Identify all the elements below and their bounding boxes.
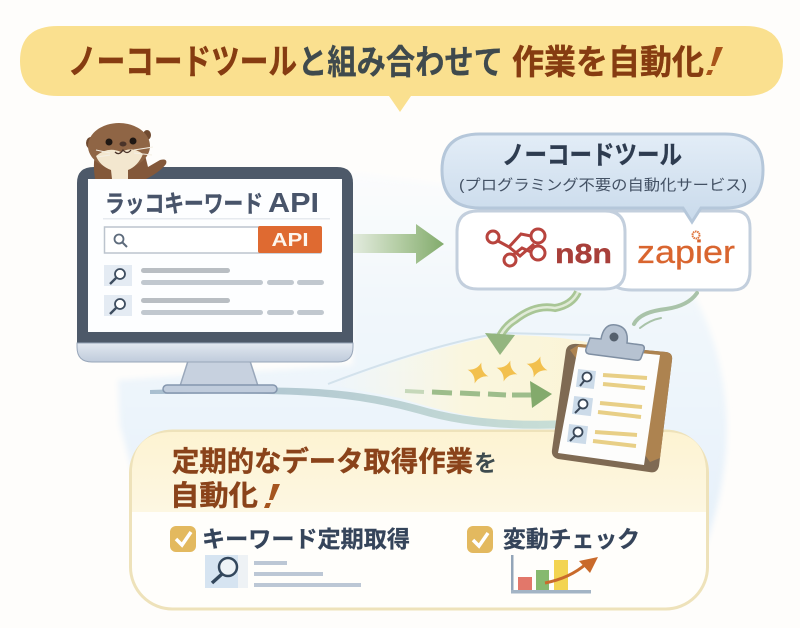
clipboard row 2	[572, 396, 642, 417]
title banner	[20, 26, 783, 112]
clipboard	[552, 325, 672, 472]
screen heading: ラッコキーワード	[105, 191, 263, 218]
result row 1	[104, 265, 324, 286]
bubble subheading: (プログラミング不要の自動化サービス)	[459, 177, 747, 194]
bubble heading: ノーコードツール	[502, 140, 682, 170]
screen heading: API	[268, 187, 319, 218]
n8n card: n8n	[555, 238, 612, 269]
monitor screen	[88, 179, 342, 332]
background glow	[118, 172, 727, 560]
no-code tool speech bubble	[442, 134, 763, 222]
sparkles	[464, 353, 551, 387]
flow ribbon to clipboard	[150, 333, 600, 430]
panel heading	[170, 445, 497, 511]
search box: API	[272, 230, 308, 250]
n8n card	[457, 211, 625, 289]
search box	[104, 226, 322, 253]
clipboard clip	[586, 325, 644, 360]
arrow: zapier motion lines	[634, 293, 697, 328]
dashed flow arrow	[405, 381, 552, 408]
zapier card	[600, 211, 750, 290]
title text	[68, 43, 723, 82]
checklist item: change check: 変動チェック	[503, 526, 640, 552]
title text: ノーコードツール	[68, 43, 297, 82]
icon: search document	[205, 555, 361, 588]
icon: otter mascot	[86, 123, 166, 179]
monitor	[77, 167, 353, 393]
monitor body	[77, 167, 353, 345]
panel heading: 自動化	[170, 480, 258, 511]
title text: 作業を自動化	[512, 44, 704, 82]
n8n and zapier logo cards	[457, 211, 750, 290]
result row 2	[104, 295, 324, 316]
bottom summary panel	[130, 431, 708, 609]
icon: rising bar chart	[511, 555, 598, 594]
monitor chin	[77, 343, 353, 362]
clipboard row 1	[576, 369, 647, 389]
arrow: n8n to clipboard	[485, 292, 578, 355]
checklist item: keyword fetch: キーワード定期取得	[202, 526, 410, 552]
panel heading: 定期的なデータ取得作業	[172, 445, 473, 477]
arrow: API to no-code tools	[353, 224, 444, 264]
panel heading: を	[474, 450, 497, 476]
title text: と組み合わせて	[298, 44, 503, 82]
clipboard row 3	[567, 424, 637, 446]
zapier card: zapier	[637, 234, 735, 270]
monitor stand	[180, 361, 258, 386]
